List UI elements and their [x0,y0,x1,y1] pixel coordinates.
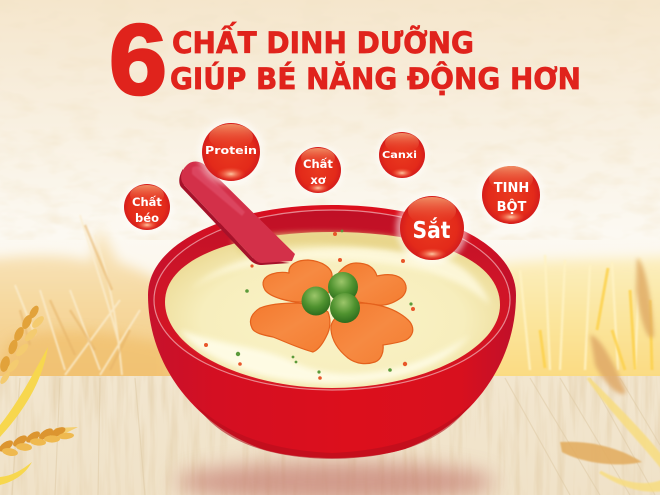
nutrient: Sắt [396,192,468,264]
nutrient: Tinh bột: BỘT [497,199,527,215]
nutrient: Tinh bột [478,162,544,228]
nutrient: Canxi [376,129,428,181]
title [109,4,581,116]
nutrient: Chất béo: Chất [132,195,162,209]
background sky with paper texture [0,0,660,378]
nutrient: Protein [198,119,264,185]
bowl shadow on table [175,462,495,495]
nutrient: Sắt: Sắt [412,217,450,244]
title numeral 6: 6 [109,4,167,116]
nutrient: Chất béo: béo [135,211,159,225]
nutrient: Canxi: Canxi [382,150,417,161]
wooden table [0,376,660,495]
wheat ear: left upper [0,304,46,385]
nutrient: Chất béo [121,181,173,233]
spoon [179,161,295,265]
nutrient: Tinh bột: TINH [494,181,529,196]
wheat ear: left lower [0,425,78,457]
wheat field left [0,215,200,395]
nutrient: Chất xơ: Chất [303,157,333,171]
carrot flower [250,260,413,364]
wheat blade: left [0,347,48,485]
title line 2: GIÚP BÉ NĂNG ĐỘNG HƠN [170,62,581,96]
carrot: top left petal [263,260,332,302]
wheat ear: right blurred upper [636,258,654,338]
wheat ear: right blurred middle [590,335,626,394]
wheat field right [480,255,660,395]
carrot: top right petal [337,263,406,305]
carrot: bottom right petal [331,303,413,364]
wheat blade: right [588,378,660,490]
peas [302,272,360,323]
wheat ear: right blurred lower [560,442,642,464]
bowl [148,205,516,459]
nutrient: Chất xơ: xơ [310,173,327,187]
carrot: bottom left petal [250,303,330,352]
title line 1: CHẤT DINH DƯỠNG [172,22,474,60]
porridge [165,230,500,388]
nutrient: Protein: Protein [205,144,257,157]
nutrient: Chất xơ [292,144,344,196]
